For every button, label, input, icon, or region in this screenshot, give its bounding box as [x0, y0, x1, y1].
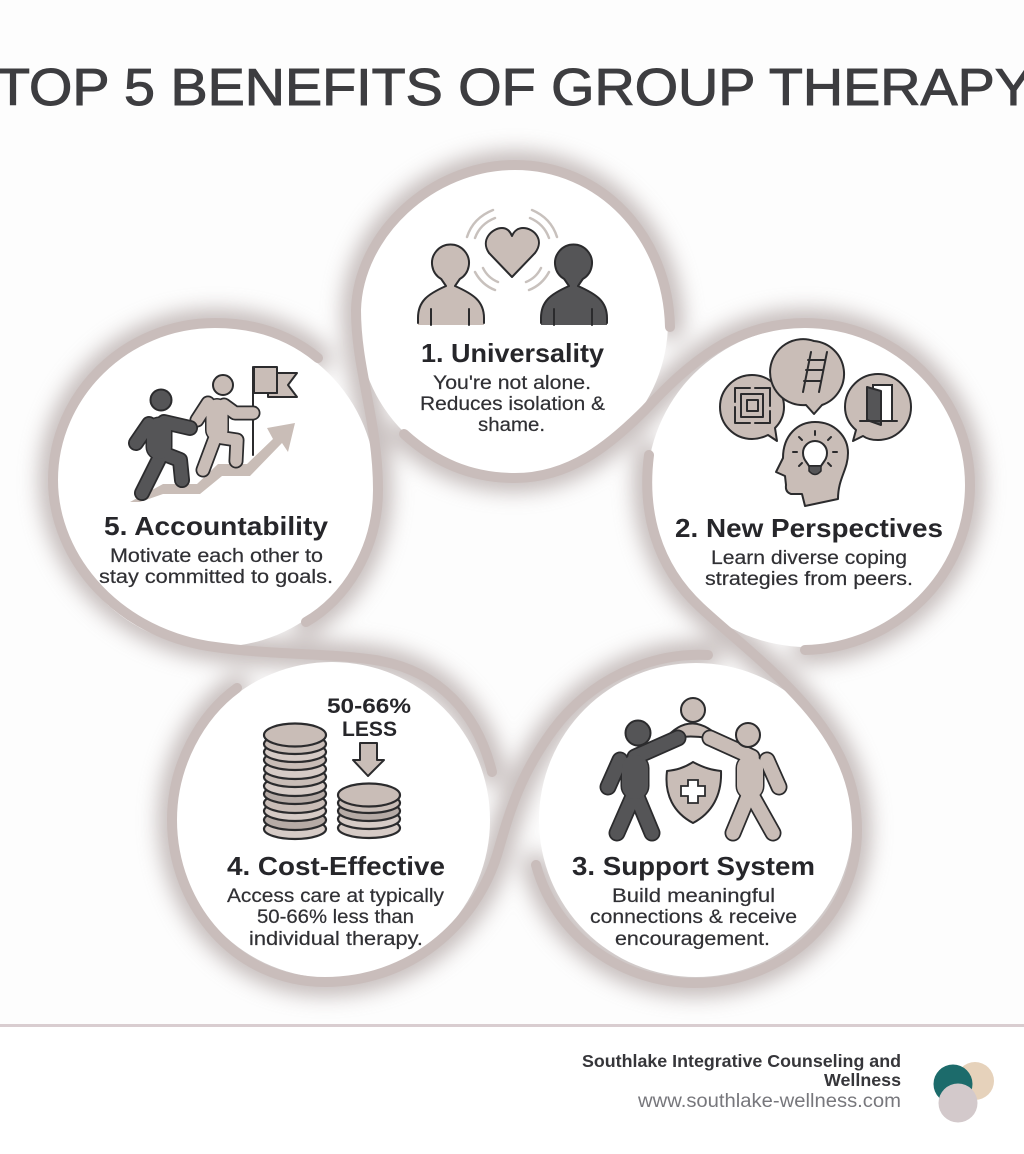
- savings label: [327, 695, 411, 741]
- heading: 1. Universality: [421, 338, 605, 368]
- description: Access care at typically: [227, 886, 445, 907]
- description: Build meaningful: [612, 886, 775, 907]
- footer organisation text: www.southlake-wellness.com: [637, 1091, 901, 1112]
- description: 50-66% less than: [257, 907, 414, 928]
- icon: two people and heart: [418, 210, 607, 325]
- description: [420, 373, 605, 436]
- icon: two climbers, flag and rising arrow: [130, 367, 297, 502]
- logo: [934, 1062, 994, 1122]
- heading: 2. New Perspectives: [675, 513, 943, 543]
- panel: 5 Accountability: [56, 327, 376, 647]
- footer organisation text: Wellness: [824, 1070, 901, 1090]
- icon: thought bubbles and head: [720, 339, 911, 506]
- description: [705, 548, 913, 590]
- panel: 4 Cost-Effective: [174, 662, 490, 978]
- description: stay committed to goals.: [99, 567, 333, 588]
- heading: 3. Support System: [572, 851, 815, 881]
- description: shame.: [478, 415, 545, 436]
- description: [227, 886, 445, 950]
- description: Motivate each other to: [110, 546, 323, 567]
- description: You're not alone.: [433, 373, 591, 394]
- swirl ring outlines: [53, 165, 970, 983]
- savings label: 50-66%: [327, 695, 411, 718]
- panel: 1 Universality: [358, 167, 668, 477]
- panel: 2 New Perspectives: [647, 327, 967, 647]
- description: individual therapy.: [249, 929, 423, 950]
- description: [99, 546, 333, 588]
- title: TOP 5 BENEFITS OF GROUP THERAPY: [0, 59, 1024, 117]
- description: [590, 886, 797, 950]
- description: connections & receive: [590, 907, 797, 928]
- icon: three people and shield: [608, 698, 779, 833]
- savings label: LESS: [342, 718, 397, 741]
- description: strategies from peers.: [705, 569, 913, 590]
- footer organisation text: [582, 1051, 901, 1112]
- heading: 4. Cost-Effective: [227, 851, 445, 881]
- heading: 5. Accountability: [104, 511, 329, 541]
- icon: coin stacks and arrow: [264, 695, 411, 839]
- footer organisation text: Southlake Integrative Counseling and: [582, 1051, 901, 1071]
- description: Learn diverse coping: [711, 548, 907, 569]
- description: encouragement.: [615, 929, 770, 950]
- panel: 3 Support System: [539, 663, 853, 977]
- description: Reduces isolation &: [420, 394, 605, 415]
